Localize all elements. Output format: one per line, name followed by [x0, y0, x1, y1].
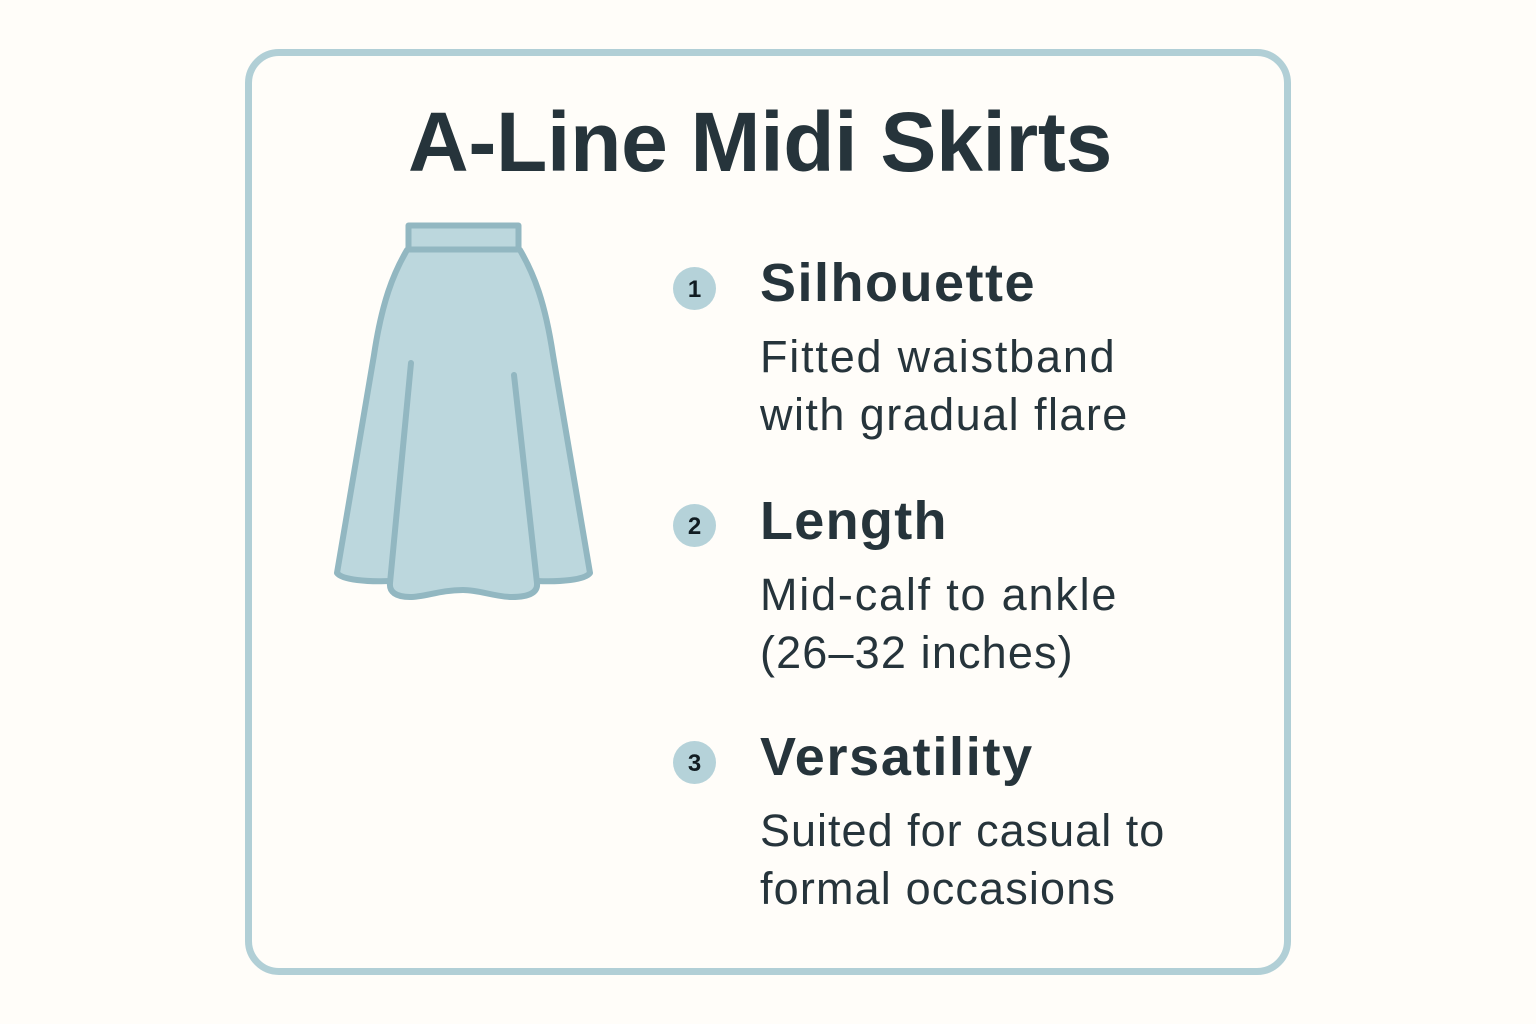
text: length description: (26–32 inches): [760, 627, 1074, 678]
badge 1: 1: [688, 276, 701, 303]
badge 2: 2: [688, 513, 701, 540]
badge 3: [673, 741, 716, 784]
panel: card frame: [245, 49, 1291, 975]
text: length description: Mid-calf to ankle: [760, 569, 1118, 620]
text: length description: [760, 569, 1118, 678]
heading: Versatility: Versatility: [760, 727, 1034, 787]
text: silhouette description: Fitted waistband: [760, 331, 1116, 382]
heading: Silhouette: Silhouette: [760, 253, 1036, 313]
badge 3: 3: [688, 750, 701, 777]
text: versatility description: Suited for casual to: [760, 805, 1165, 856]
text: silhouette description: [760, 331, 1129, 440]
badge 1: [673, 267, 716, 310]
badge 2: [673, 504, 716, 547]
title: A-Line Midi Skirts: [408, 95, 1112, 189]
text: versatility description: formal occasions: [760, 863, 1116, 914]
text: versatility description: [760, 805, 1165, 914]
icon: skirt illustration: [334, 222, 593, 600]
heading: Length: Length: [760, 491, 948, 551]
text: silhouette description: with gradual flare: [760, 389, 1129, 440]
